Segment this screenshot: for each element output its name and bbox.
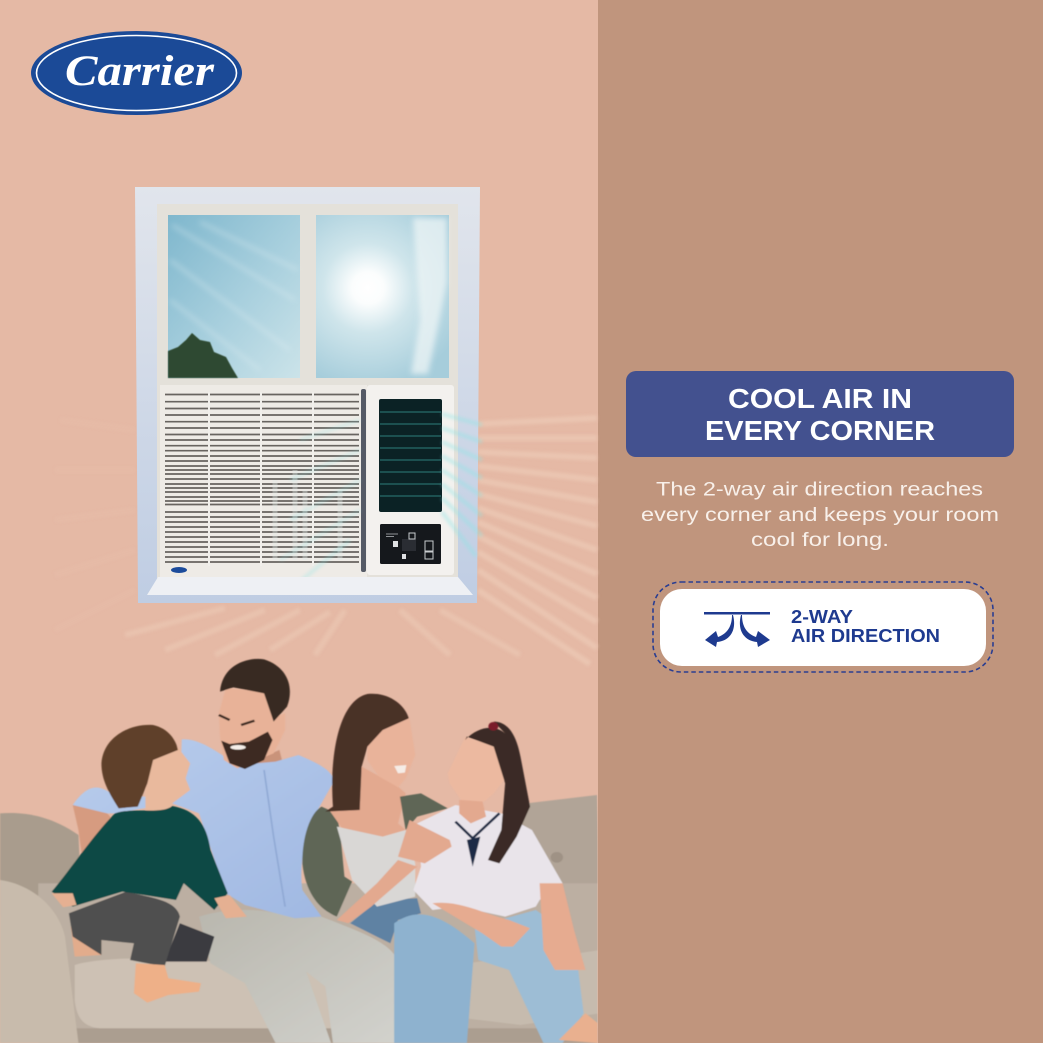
control display — [380, 524, 441, 564]
boy — [52, 725, 247, 1003]
window sill — [147, 577, 473, 595]
heading banner: COOL AIR IN — [728, 383, 912, 414]
right sky pane with sun — [316, 215, 449, 378]
left sky pane — [168, 215, 300, 378]
sofa — [0, 795, 600, 1043]
cool air glow — [280, 414, 482, 590]
left wall background — [0, 0, 598, 1043]
tree — [168, 333, 238, 378]
logo: Carrier: Carrier — [65, 48, 215, 95]
body text — [641, 478, 999, 551]
body text: cool for long. — [751, 529, 889, 551]
air conditioner control panel — [367, 385, 454, 575]
man — [73, 659, 399, 1043]
window opening — [157, 204, 458, 578]
heading banner: EVERY CORNER — [705, 415, 935, 446]
feature badge: 2-way air direction: AIR DIRECTION — [791, 626, 940, 646]
body text: The 2-way air direction reaches — [656, 478, 983, 500]
feature badge: 2-way air direction: 2-WAY — [791, 607, 853, 627]
logo: Carrier — [31, 31, 242, 115]
vent louvres — [379, 399, 442, 512]
window frame — [135, 187, 480, 603]
air conditioner grille — [160, 385, 367, 577]
body text: every corner and keeps your room — [641, 504, 999, 526]
woman — [302, 694, 448, 943]
family on sofa — [0, 659, 600, 1043]
airflow streams — [55, 418, 597, 664]
girl — [394, 722, 598, 1043]
right panel background — [598, 0, 1043, 1043]
icon: two-way air arrows — [704, 612, 770, 647]
window with air conditioner — [135, 187, 482, 603]
feature badge: 2-way air direction — [653, 582, 993, 672]
heading banner — [626, 371, 1014, 457]
